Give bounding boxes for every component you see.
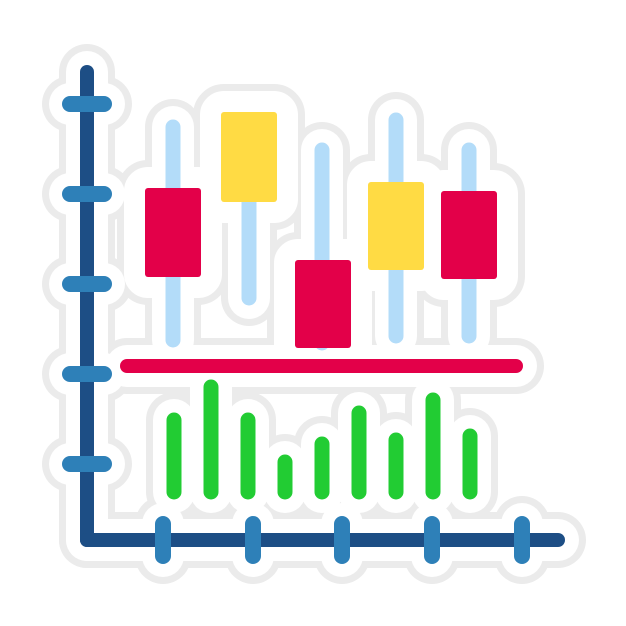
- candle wicks: [173, 120, 469, 343]
- axis ticks: [70, 104, 522, 556]
- green volume bars: [174, 387, 470, 492]
- candle bodies: [145, 112, 497, 348]
- axes: [87, 72, 558, 540]
- red baseline: [127, 359, 516, 373]
